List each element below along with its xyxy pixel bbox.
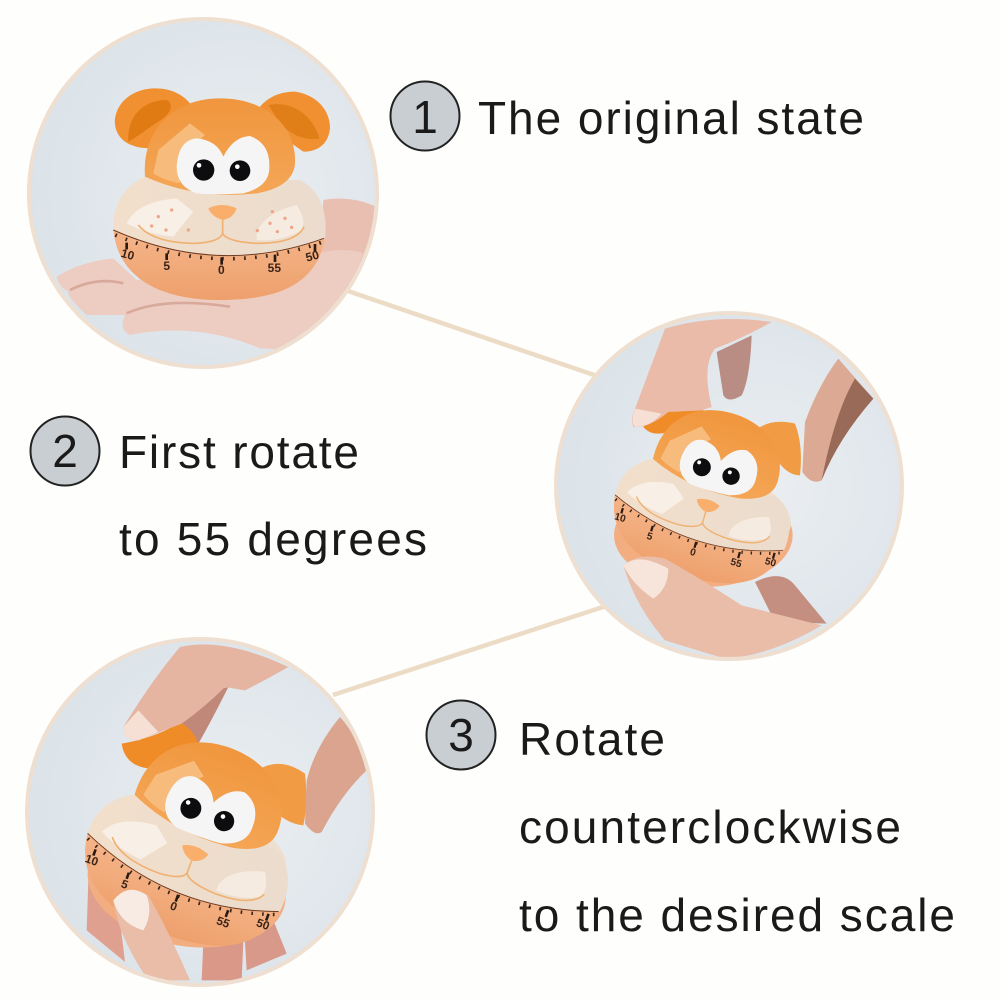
timer body: [614, 410, 790, 584]
step 3 label: Rotate: [519, 713, 665, 765]
left ear: [122, 722, 198, 769]
upper fingers: [632, 319, 873, 482]
step 2 label: to 55 degrees: [119, 513, 427, 565]
lower fingers: [623, 556, 822, 659]
step 2 label: [119, 426, 427, 565]
timer body: 5: [163, 259, 170, 273]
timer body: 50: [763, 556, 778, 570]
timer body: 10: [83, 852, 100, 869]
photo circle 2: fingers gripping timer: [556, 313, 902, 659]
underside of timer: [614, 492, 793, 587]
timer body: 5: [119, 877, 130, 892]
timer body: [113, 98, 326, 300]
photo circle 3: fingers rotating timer: [27, 639, 373, 985]
timer body: [85, 742, 288, 946]
timer body: 55: [729, 557, 743, 570]
timer body: 10: [613, 511, 627, 525]
step 1 number badge: [390, 82, 460, 150]
timer body: 50: [255, 916, 272, 933]
timer body: 0: [689, 547, 697, 559]
upper fingers: [123, 644, 367, 833]
step 3 number badge: [426, 700, 496, 770]
step 2 number badge: [30, 416, 100, 486]
step 3 number badge: 3: [448, 709, 474, 761]
lower fingers: [113, 890, 190, 980]
timer body: 55: [268, 261, 281, 275]
back fingers: [717, 335, 827, 624]
timer body: 5: [645, 531, 654, 543]
step 3 label: [519, 713, 955, 941]
right ear: [760, 422, 801, 475]
step 3 label: to the desired scale: [519, 889, 955, 941]
left ear: [115, 88, 190, 148]
step 2 number badge: 2: [52, 425, 78, 477]
right ear: [260, 92, 330, 152]
photo circle 1: timer on open palm: [29, 19, 377, 367]
underside of timer: [88, 840, 286, 948]
timer body: 0: [218, 263, 225, 277]
hand under timer: [57, 198, 377, 350]
right ear: [260, 764, 306, 825]
step 3 label: counterclockwise: [519, 801, 901, 853]
left ear: [643, 410, 704, 434]
timer body: 10: [119, 246, 136, 263]
step 1 number badge: 1: [412, 91, 438, 143]
timer body: 55: [215, 914, 232, 931]
connector line: state 2 to state 3: [333, 606, 606, 695]
timer body: 50: [304, 248, 321, 265]
timer body: 0: [168, 900, 179, 914]
step 2 label: First rotate: [119, 426, 359, 478]
connector line: state 1 to state 2: [345, 290, 597, 376]
back fingers: [87, 687, 287, 980]
step 1 label: The original state: [478, 92, 864, 144]
